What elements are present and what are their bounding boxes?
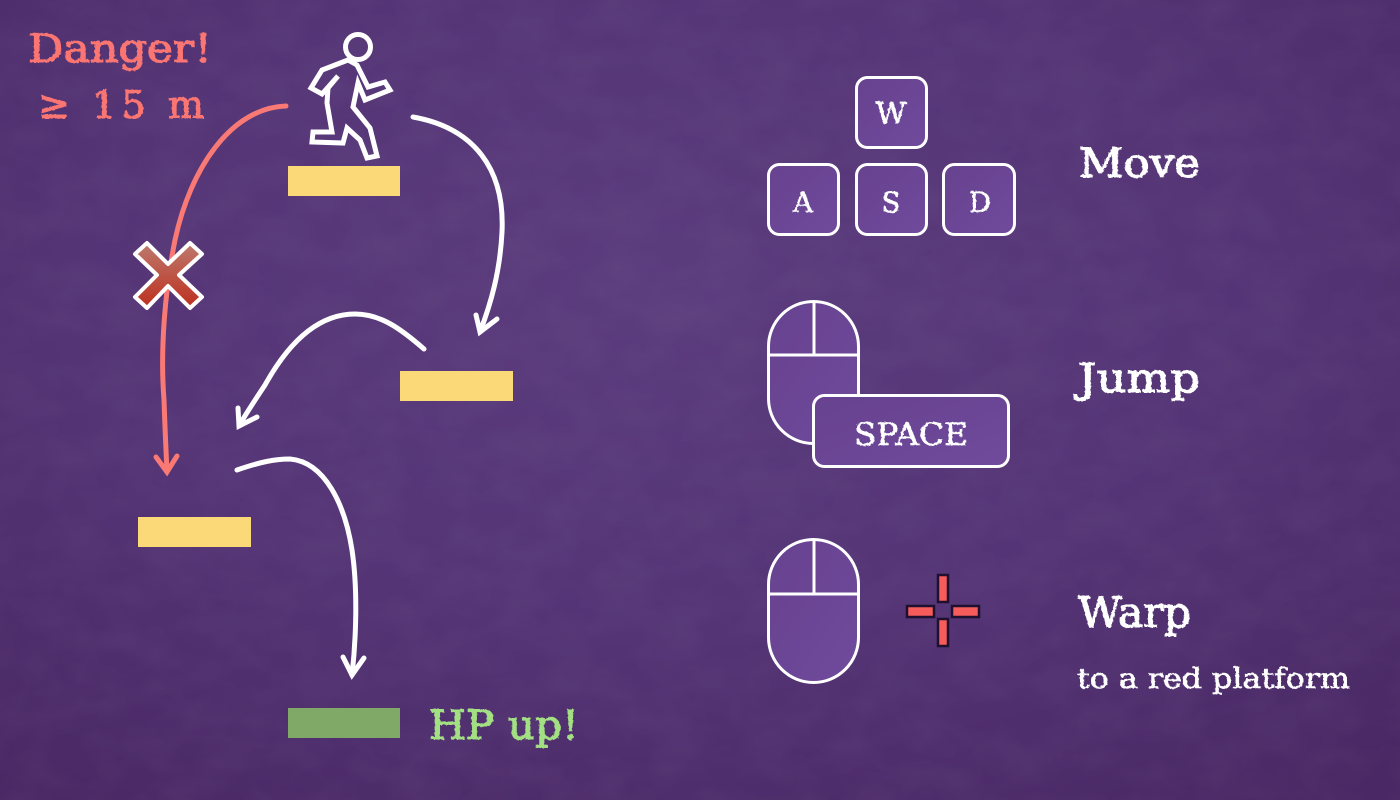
platform: start: [288, 166, 400, 196]
key: D: [944, 164, 1014, 234]
platform: middle right: [400, 371, 513, 401]
key: SPACE: [814, 396, 1008, 466]
icon: red cross: [135, 243, 202, 308]
key: W: [856, 78, 926, 148]
heading: danger warning: ≥ 15 m: [38, 83, 204, 127]
label: Move: Move: [1079, 141, 1200, 187]
heading: danger warning: [28, 27, 212, 127]
arrow: jump to right platform: [413, 117, 502, 332]
arrow: danger fall: [156, 106, 286, 472]
icon: red crosshair: [907, 575, 979, 646]
key: A: A: [792, 186, 814, 219]
key: D: D: [969, 186, 991, 219]
label: Jump: Jump: [1073, 356, 1200, 402]
key: W: W: [876, 97, 907, 132]
icon: mouse, warp: [768, 540, 858, 682]
key: A: [768, 164, 838, 234]
heading: danger warning: Danger!: [28, 27, 212, 72]
arrow: jump to green platform: [237, 459, 364, 675]
label: Warp: Warp: [1078, 588, 1191, 637]
key: SPACE: SPACE: [854, 417, 968, 453]
icon: mouse, jump: [768, 302, 858, 444]
key: S: S: [881, 186, 901, 219]
platform: green HP: [288, 708, 400, 738]
icon: running person: [311, 34, 390, 158]
label: HP up: HP up!: [429, 703, 579, 749]
label: to a red platform: to a red platform: [1077, 662, 1350, 695]
key: S: [856, 164, 926, 234]
arrow: jump to left platform: [238, 314, 424, 426]
platform: middle left: [138, 517, 251, 547]
